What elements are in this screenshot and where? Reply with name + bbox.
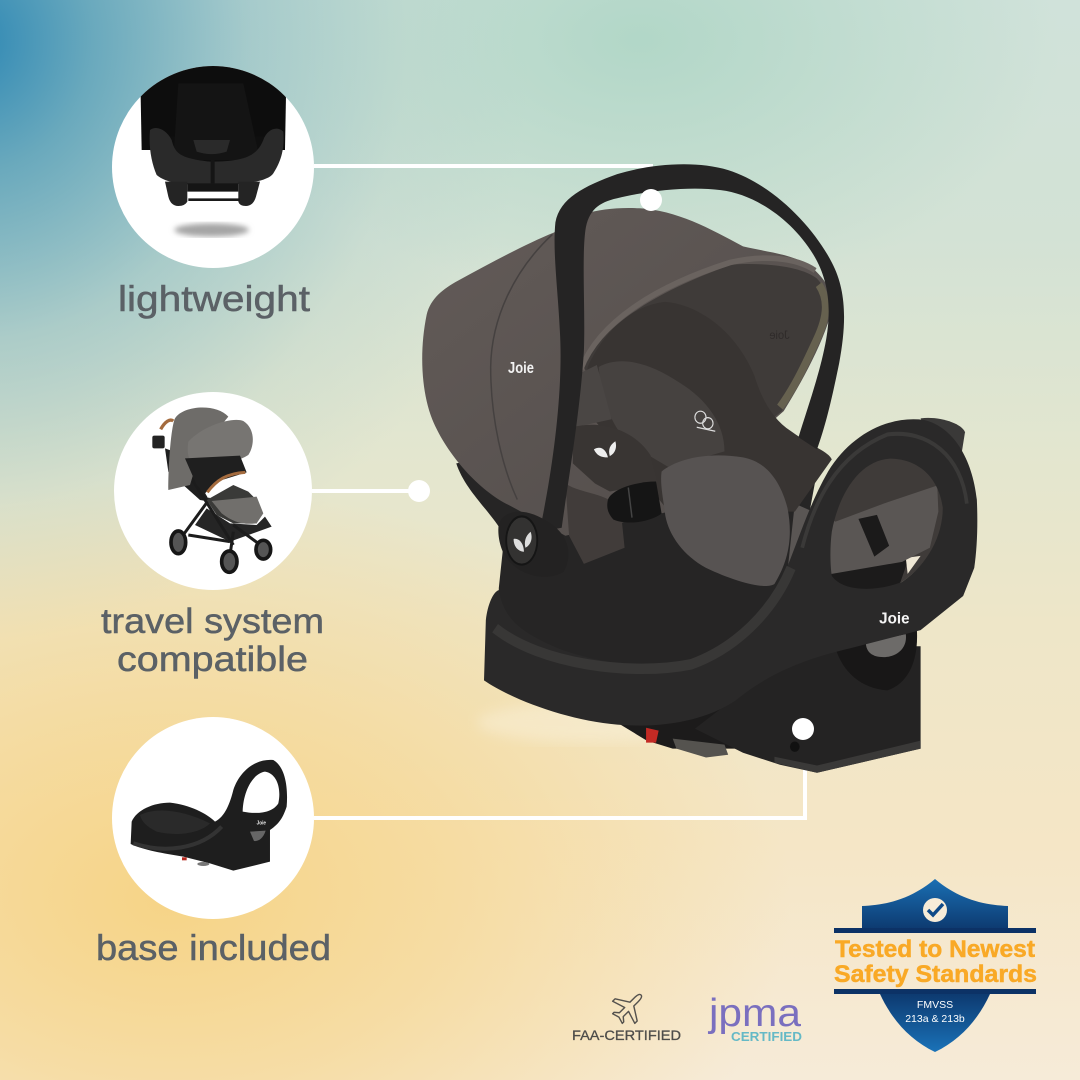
strap <box>858 515 889 557</box>
canopy inner lining <box>584 264 828 471</box>
buckle highlight <box>628 488 632 518</box>
ring highlight <box>802 434 967 548</box>
opening backfill <box>828 456 945 589</box>
shoulder strap <box>575 365 612 427</box>
body pad <box>573 425 658 492</box>
light gap under seat <box>906 556 921 574</box>
circle: lightweight <box>112 66 314 268</box>
canopy panel seam <box>491 234 552 500</box>
seat shell <box>456 431 817 664</box>
icon: airplane <box>606 984 652 1030</box>
anchor dots <box>408 189 814 740</box>
red belt lock <box>646 728 659 743</box>
foot-end pad <box>787 486 938 574</box>
main product: infant car seat on base <box>422 164 977 773</box>
release handle recess <box>836 630 917 690</box>
canopy rim band <box>581 258 815 369</box>
text: 213a & 213b: 213a & 213b <box>905 1013 965 1025</box>
heading: Tested to Newest: Tested to Newest <box>835 936 1035 963</box>
hood Joie logo: Joie <box>508 359 534 377</box>
label: lightweight: lightweight <box>118 278 310 319</box>
foot block hole <box>790 741 800 752</box>
band top <box>834 928 1036 933</box>
image: car seat base: Joie <box>257 820 266 826</box>
image: car seat base <box>131 760 287 871</box>
text: certified: CERTIFIED <box>731 1030 802 1044</box>
FAA certified badge <box>572 984 681 1043</box>
label: compatible: compatible <box>117 640 308 679</box>
bear icon on head pad <box>695 411 715 431</box>
leaf logo on body pad <box>594 441 616 457</box>
floor glow <box>477 702 699 743</box>
foot block lower lip <box>774 741 921 773</box>
icon: check circle <box>923 898 947 922</box>
feature: travel system compatible <box>101 392 324 679</box>
dark under seat <box>828 556 910 596</box>
buckle <box>607 481 662 523</box>
feature: base included <box>96 717 331 968</box>
under-tray strut <box>617 709 736 749</box>
grey release handle <box>866 634 906 657</box>
text: jpma: jpma <box>708 992 801 1035</box>
safety standards shield <box>834 879 1037 1052</box>
leaf logo on pivot <box>514 532 532 552</box>
image: stroller <box>152 407 272 572</box>
label: base included: base included <box>96 927 331 968</box>
text: FAA-certified: FAA-CERTIFIED <box>572 1028 681 1043</box>
base tray and side ring <box>484 419 977 726</box>
canopy lining highlight <box>780 285 826 407</box>
image: seat front view <box>140 60 287 237</box>
shield bottom <box>880 994 990 1052</box>
base Joie logo: Joie <box>879 610 910 627</box>
heading: Safety Standards: Safety Standards <box>834 961 1037 988</box>
infographic canvas <box>98 66 1036 1052</box>
connector lines <box>312 166 805 818</box>
sun canopy <box>422 208 831 536</box>
circle: stroller <box>114 392 312 590</box>
hidden seat end above ring <box>921 418 965 455</box>
mirrored logo in hood: Joie <box>769 329 790 342</box>
grey pedal <box>673 739 728 758</box>
crotch flap <box>565 483 625 564</box>
JPMA certified badge <box>708 992 802 1044</box>
head pad <box>599 361 724 467</box>
shield top <box>862 879 1008 929</box>
circle: base <box>112 717 314 919</box>
text: FMVSS: FMVSS <box>917 999 953 1011</box>
feature: lightweight <box>112 60 314 319</box>
leg pad <box>661 455 790 586</box>
seat behind the ring opening <box>787 456 945 596</box>
carry handle <box>540 164 844 532</box>
foot block <box>695 646 921 773</box>
label: travel system: travel system <box>101 602 324 641</box>
base tray highlight <box>495 568 791 669</box>
head rest <box>584 302 832 512</box>
band bottom <box>834 989 1036 994</box>
handle pivot <box>498 512 568 577</box>
pivot disc <box>506 516 537 565</box>
